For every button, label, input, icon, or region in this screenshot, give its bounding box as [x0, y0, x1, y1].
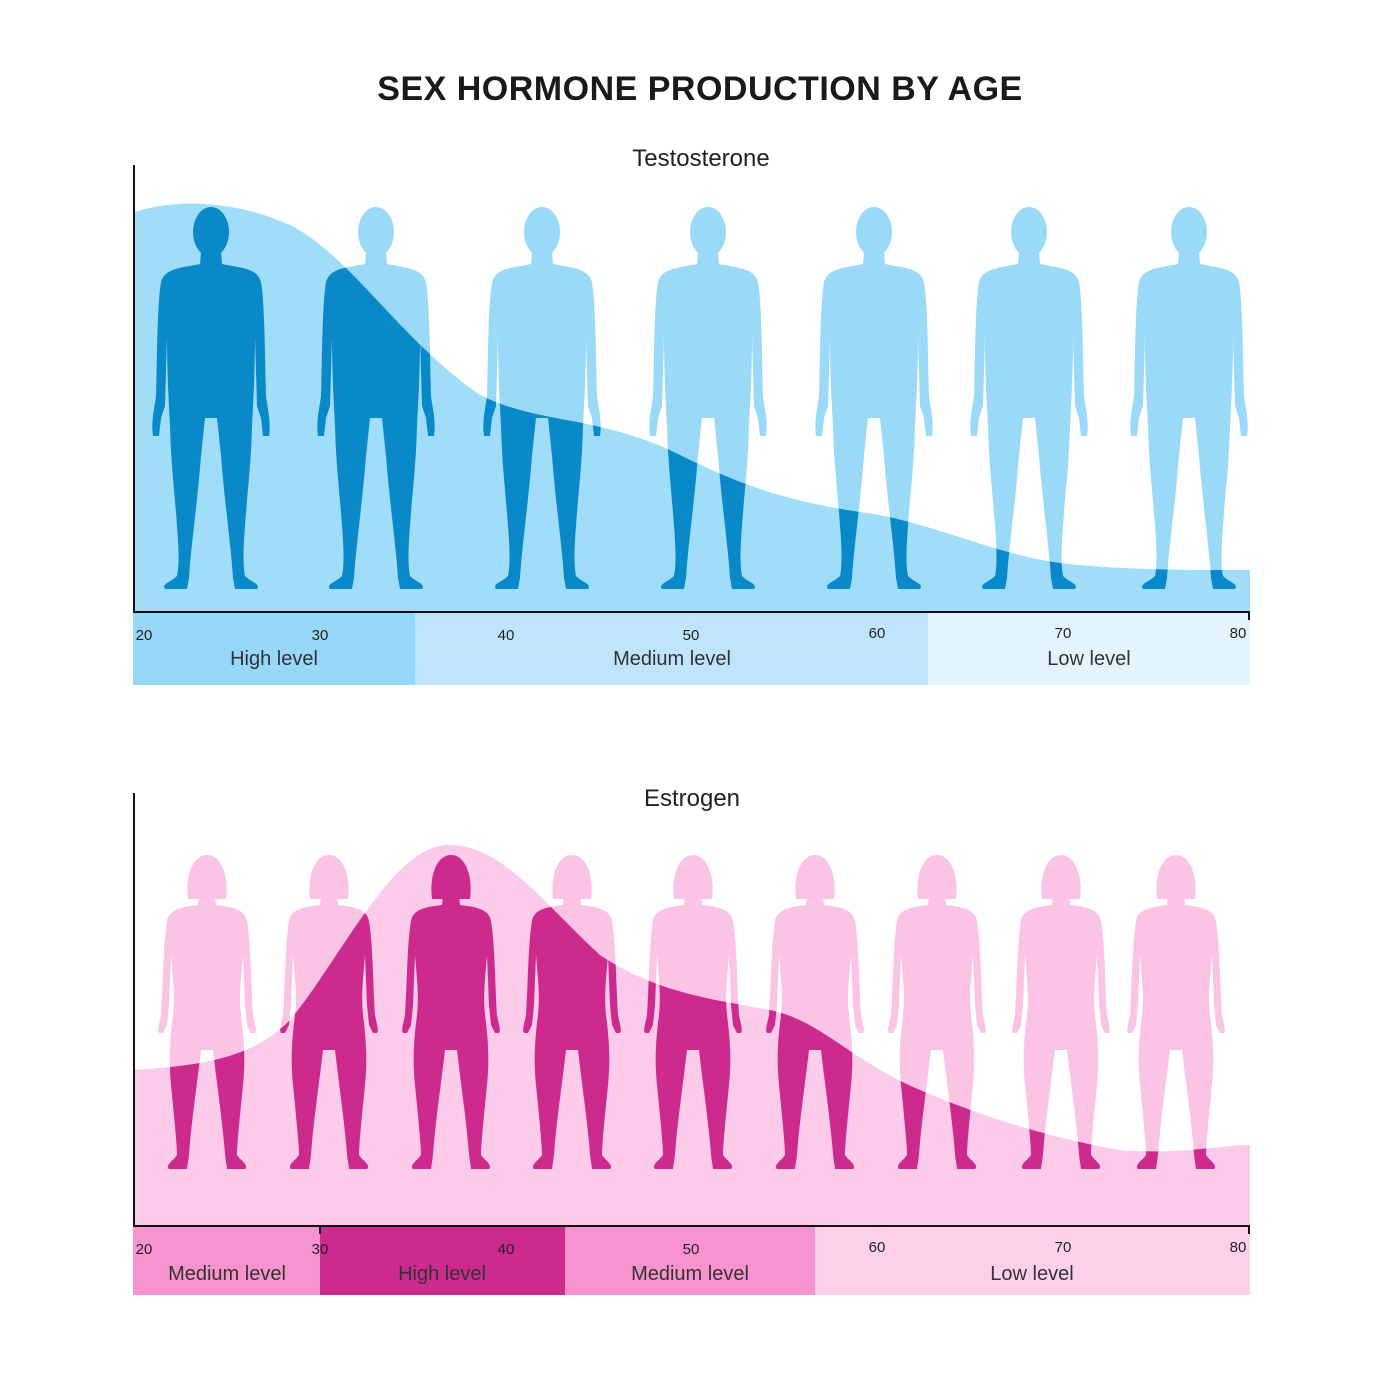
- level labels: [230, 648, 1131, 670]
- axis labels: 70: [1055, 625, 1071, 642]
- axis labels: 30: [312, 627, 328, 644]
- heading: Testosterone: Testosterone: [632, 145, 770, 172]
- level labels: Medium level: [613, 648, 731, 670]
- level bands: [133, 1227, 1250, 1295]
- axis labels: 60: [869, 625, 885, 642]
- heading: Estrogen: Estrogen: [644, 785, 740, 812]
- axis labels: 50: [683, 627, 699, 644]
- female figures dark: [158, 855, 1225, 1169]
- axis labels: [136, 625, 1246, 644]
- level labels: High level: [398, 1263, 486, 1285]
- level labels: Low level: [990, 1263, 1074, 1285]
- male figures light: [152, 207, 1248, 589]
- axes: [134, 793, 1250, 1234]
- level labels: [168, 1263, 1074, 1285]
- level bands: [133, 613, 1250, 685]
- axes: [134, 165, 1250, 620]
- axis labels: 80: [1230, 625, 1246, 642]
- title: SEX HORMONE PRODUCTION BY AGE: [377, 70, 1023, 108]
- level labels: High level: [230, 648, 318, 670]
- female figures light: [158, 855, 1225, 1169]
- axis labels: 20: [136, 1241, 152, 1258]
- axis labels: 40: [498, 1241, 514, 1258]
- axis labels: 50: [683, 1241, 699, 1258]
- curve area: [135, 204, 1250, 611]
- axis labels: 70: [1055, 1239, 1071, 1256]
- level labels: Low level: [1047, 648, 1131, 670]
- level labels: Medium level: [168, 1263, 286, 1285]
- level labels: Medium level: [631, 1263, 749, 1285]
- male figures dark: [152, 207, 1248, 589]
- axis labels: 20: [136, 627, 152, 644]
- curve area: [135, 844, 1250, 1225]
- axis labels: 80: [1230, 1239, 1246, 1256]
- axis labels: [136, 1239, 1246, 1258]
- axis labels: 40: [498, 627, 514, 644]
- panel: testosterone chart: [133, 145, 1250, 685]
- axis labels: 60: [869, 1239, 885, 1256]
- axis labels: 30: [312, 1241, 328, 1258]
- panel: estrogen chart: [133, 785, 1250, 1295]
